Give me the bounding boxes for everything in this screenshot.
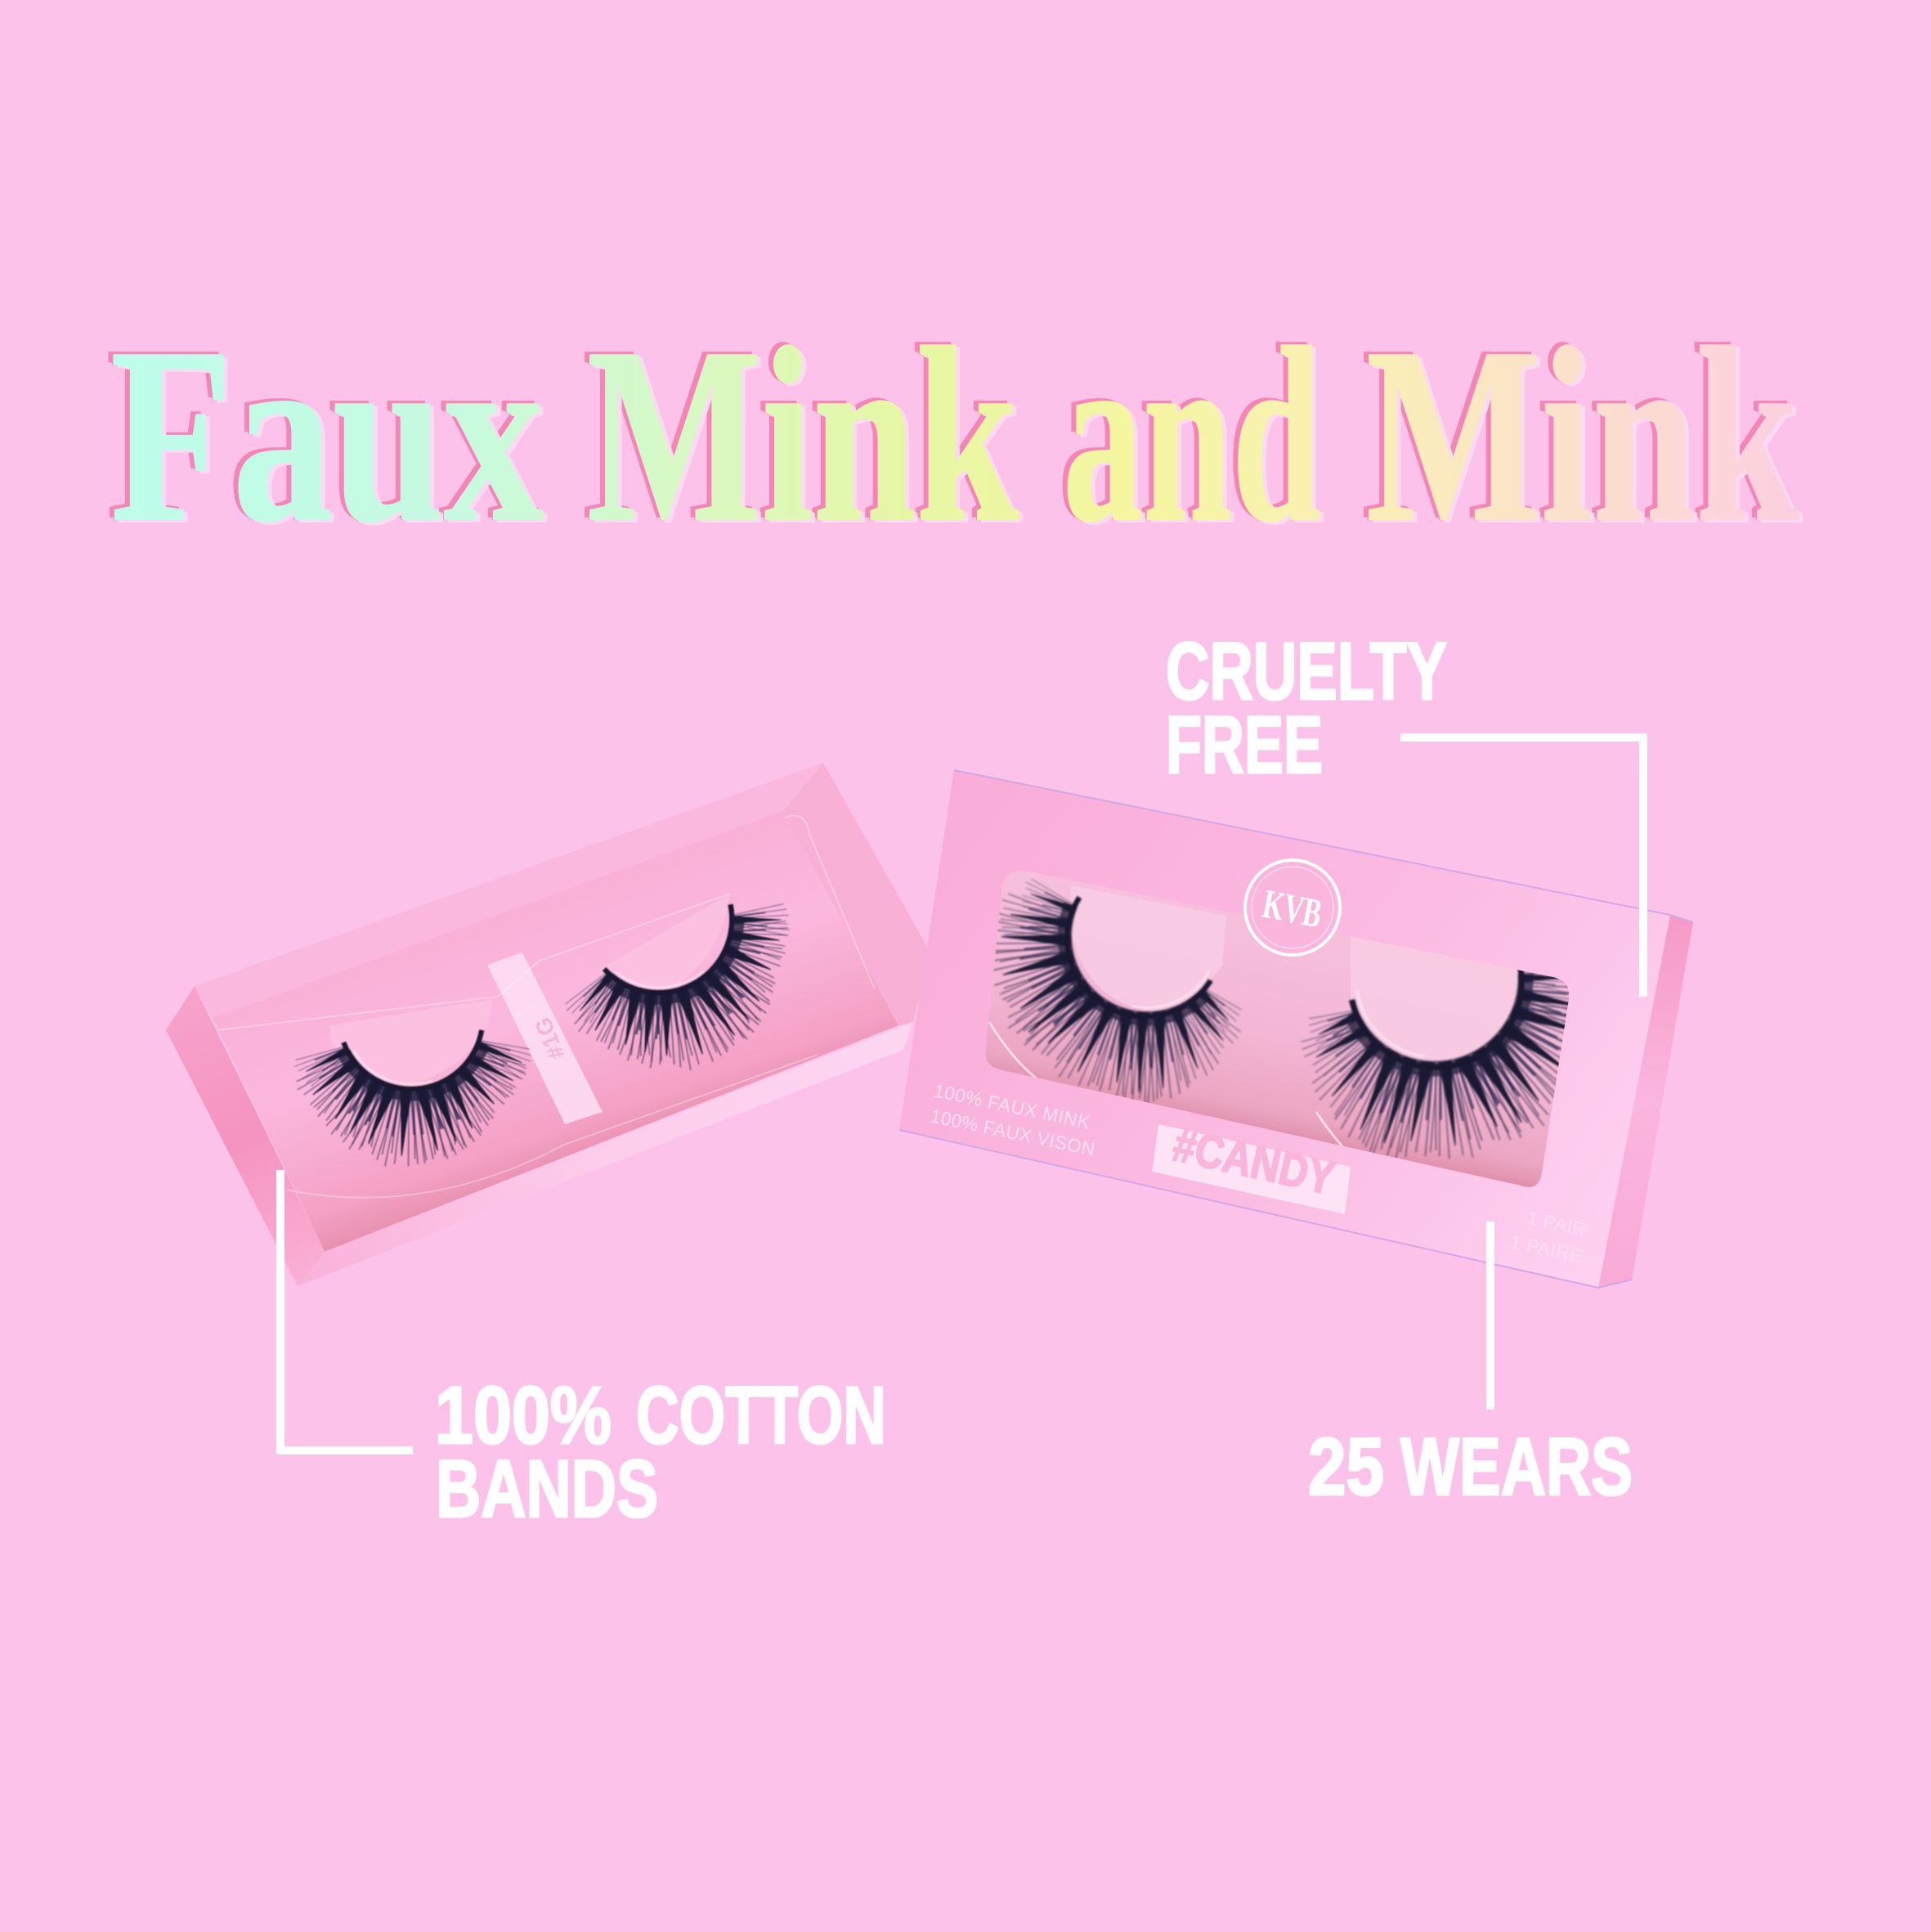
title: Faux: [110, 296, 544, 574]
quantity text: 1 PAIR: [1526, 1207, 1588, 1240]
material text: 100% FAUX MINK: [932, 1079, 1092, 1133]
callout text: COTTON: [636, 1369, 886, 1460]
box side wall: [1598, 915, 1693, 1288]
blister cup left: [330, 999, 492, 1086]
holographic edges: [899, 770, 1693, 1288]
blister cup right: [600, 894, 730, 993]
quantity text: [1508, 1207, 1588, 1266]
open lash box, left: [166, 763, 930, 1286]
box left wall: [166, 986, 325, 1286]
logo: KVB: [1259, 881, 1325, 936]
material text: 100% FAUX VISON: [929, 1105, 1097, 1160]
callout text: 25: [1308, 1421, 1384, 1512]
lash left: [984, 877, 1245, 1107]
closed lash box, right: [899, 770, 1693, 1288]
title: and: [1063, 296, 1321, 574]
clear blister tray: [217, 816, 875, 1198]
callout text: BANDS: [436, 1443, 658, 1534]
blister cup left: [1071, 885, 1226, 1011]
box front wall: [298, 1022, 913, 1286]
tray label strip: #1G: [530, 1014, 570, 1063]
blister highlights: [988, 1021, 1344, 1146]
callout text: CRUELTY: [1166, 625, 1447, 716]
title: [110, 296, 1799, 574]
callout: 25 wears: [1308, 1222, 1633, 1512]
title: Mink: [1366, 296, 1799, 574]
logo: [1245, 860, 1340, 955]
title: Mink: [587, 296, 1019, 574]
name tag #CANDY: #CANDY: [1168, 1118, 1340, 1205]
callout text: [1166, 625, 1447, 790]
callout text: WEARS: [1400, 1421, 1633, 1512]
callout text: FREE: [1166, 699, 1323, 790]
lash left: [292, 1030, 535, 1169]
quantity text: 1 PAIRE: [1508, 1230, 1584, 1266]
box top wall: [195, 763, 823, 1018]
callout text: [1308, 1421, 1633, 1512]
box right wall: [783, 763, 930, 1025]
leader line: [280, 1170, 413, 1450]
callout: 100% cotton bands: [280, 1170, 886, 1534]
window: [986, 872, 1570, 1187]
callout text: [435, 1369, 886, 1534]
leader line: [1486, 1222, 1494, 1410]
box front panel: [899, 770, 1670, 1288]
blister cup right: [1351, 937, 1517, 1061]
tray label strip: [487, 953, 603, 1124]
callout text: 100%: [435, 1369, 612, 1460]
box floor: [213, 811, 898, 1252]
material text: [929, 1079, 1097, 1160]
leader line: [1400, 737, 1643, 997]
callout: cruelty free: [1166, 625, 1643, 997]
lash right: [550, 884, 835, 1109]
lash right: [1300, 970, 1570, 1159]
